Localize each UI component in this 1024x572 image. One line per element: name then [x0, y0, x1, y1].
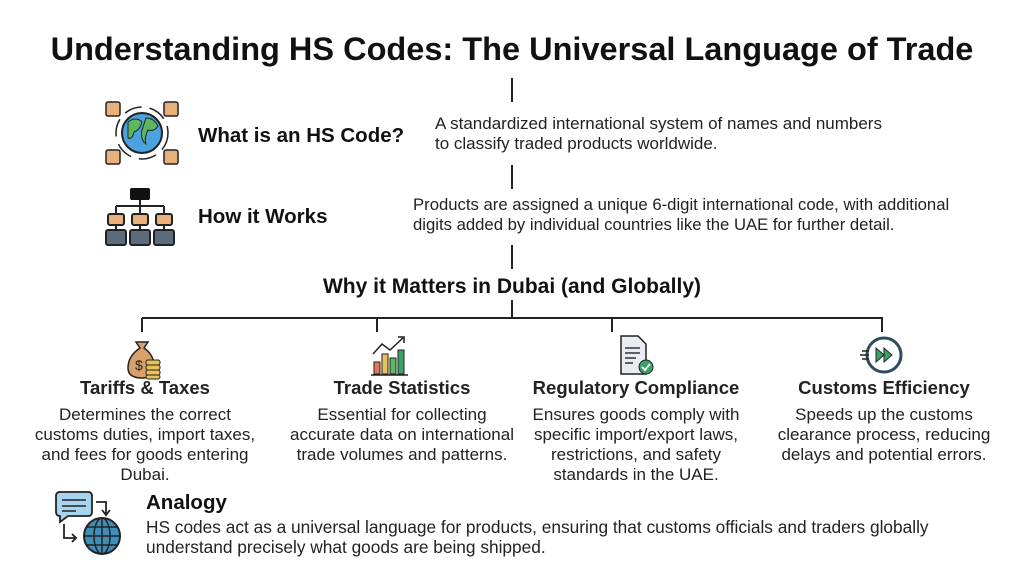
column: trade statistics: accurate data on international — [290, 425, 514, 444]
heading: why it matters: Why it Matters in Dubai (and Globally) — [323, 275, 701, 298]
text: how it works: Products are assigned a unique 6-digit international code, with additional — [413, 195, 949, 214]
heading: analogy: Analogy — [146, 491, 227, 514]
column: trade statistics: Essential for collecting — [317, 405, 487, 424]
column: trade statistics — [290, 377, 514, 464]
text: definition — [435, 114, 882, 153]
column: customs efficiency — [778, 377, 990, 464]
connector tree — [141, 300, 883, 332]
icon: document check — [620, 335, 654, 375]
column: trade statistics: Trade Statistics — [334, 377, 470, 398]
column: tariffs: and fees for goods entering — [42, 445, 248, 464]
icon: bar chart — [371, 336, 408, 376]
column: tariffs: Tariffs & Taxes — [80, 377, 210, 398]
column: tariffs: Determines the correct — [59, 405, 231, 424]
text: analogy: HS codes act as a universal language for products, ensuring that customs officials and traders globally — [146, 517, 929, 537]
heading: how it works: How it Works — [198, 205, 327, 228]
column: regulatory — [533, 377, 739, 484]
title: Understanding HS Codes: The Universal Language of Trade — [51, 31, 973, 67]
heading: what is an HS code: What is an HS Code? — [198, 124, 404, 147]
column: customs efficiency: delays and potential errors. — [781, 445, 987, 464]
column: customs efficiency: clearance process, reducing — [778, 425, 990, 444]
text: definition: to classify traded products worldwide. — [435, 134, 718, 153]
text: analogy: understand precisely what goods are being shipped. — [146, 537, 546, 557]
column: regulatory: Regulatory Compliance — [533, 377, 739, 398]
icon: money bag: $ — [135, 357, 143, 373]
column: regulatory: standards in the UAE. — [553, 465, 719, 484]
column: regulatory: restrictions, and safety — [551, 445, 721, 464]
column: regulatory: specific import/export laws, — [534, 425, 738, 444]
icon: analogy chat globe — [55, 491, 121, 555]
column: trade statistics: trade volumes and patterns. — [297, 445, 507, 464]
text: definition: A standardized international system of names and numbers — [435, 114, 882, 133]
column: tariffs: Dubai. — [120, 465, 170, 484]
column: tariffs: customs duties, import taxes, — [35, 425, 255, 444]
icon: globe with boxes — [105, 101, 179, 165]
icon: fast forward clock — [860, 336, 902, 374]
column: customs efficiency: Speeds up the customs — [795, 405, 973, 424]
column: tariffs — [35, 377, 255, 484]
text: how it works — [413, 195, 949, 234]
column: customs efficiency: Customs Efficiency — [798, 377, 970, 398]
icon: money bag — [127, 341, 160, 380]
text: how it works: digits added by individual countries like the UAE for further detail. — [413, 215, 894, 234]
text: analogy — [146, 517, 929, 557]
icon: hierarchy — [105, 188, 175, 246]
column: regulatory: Ensures goods comply with — [533, 405, 739, 424]
